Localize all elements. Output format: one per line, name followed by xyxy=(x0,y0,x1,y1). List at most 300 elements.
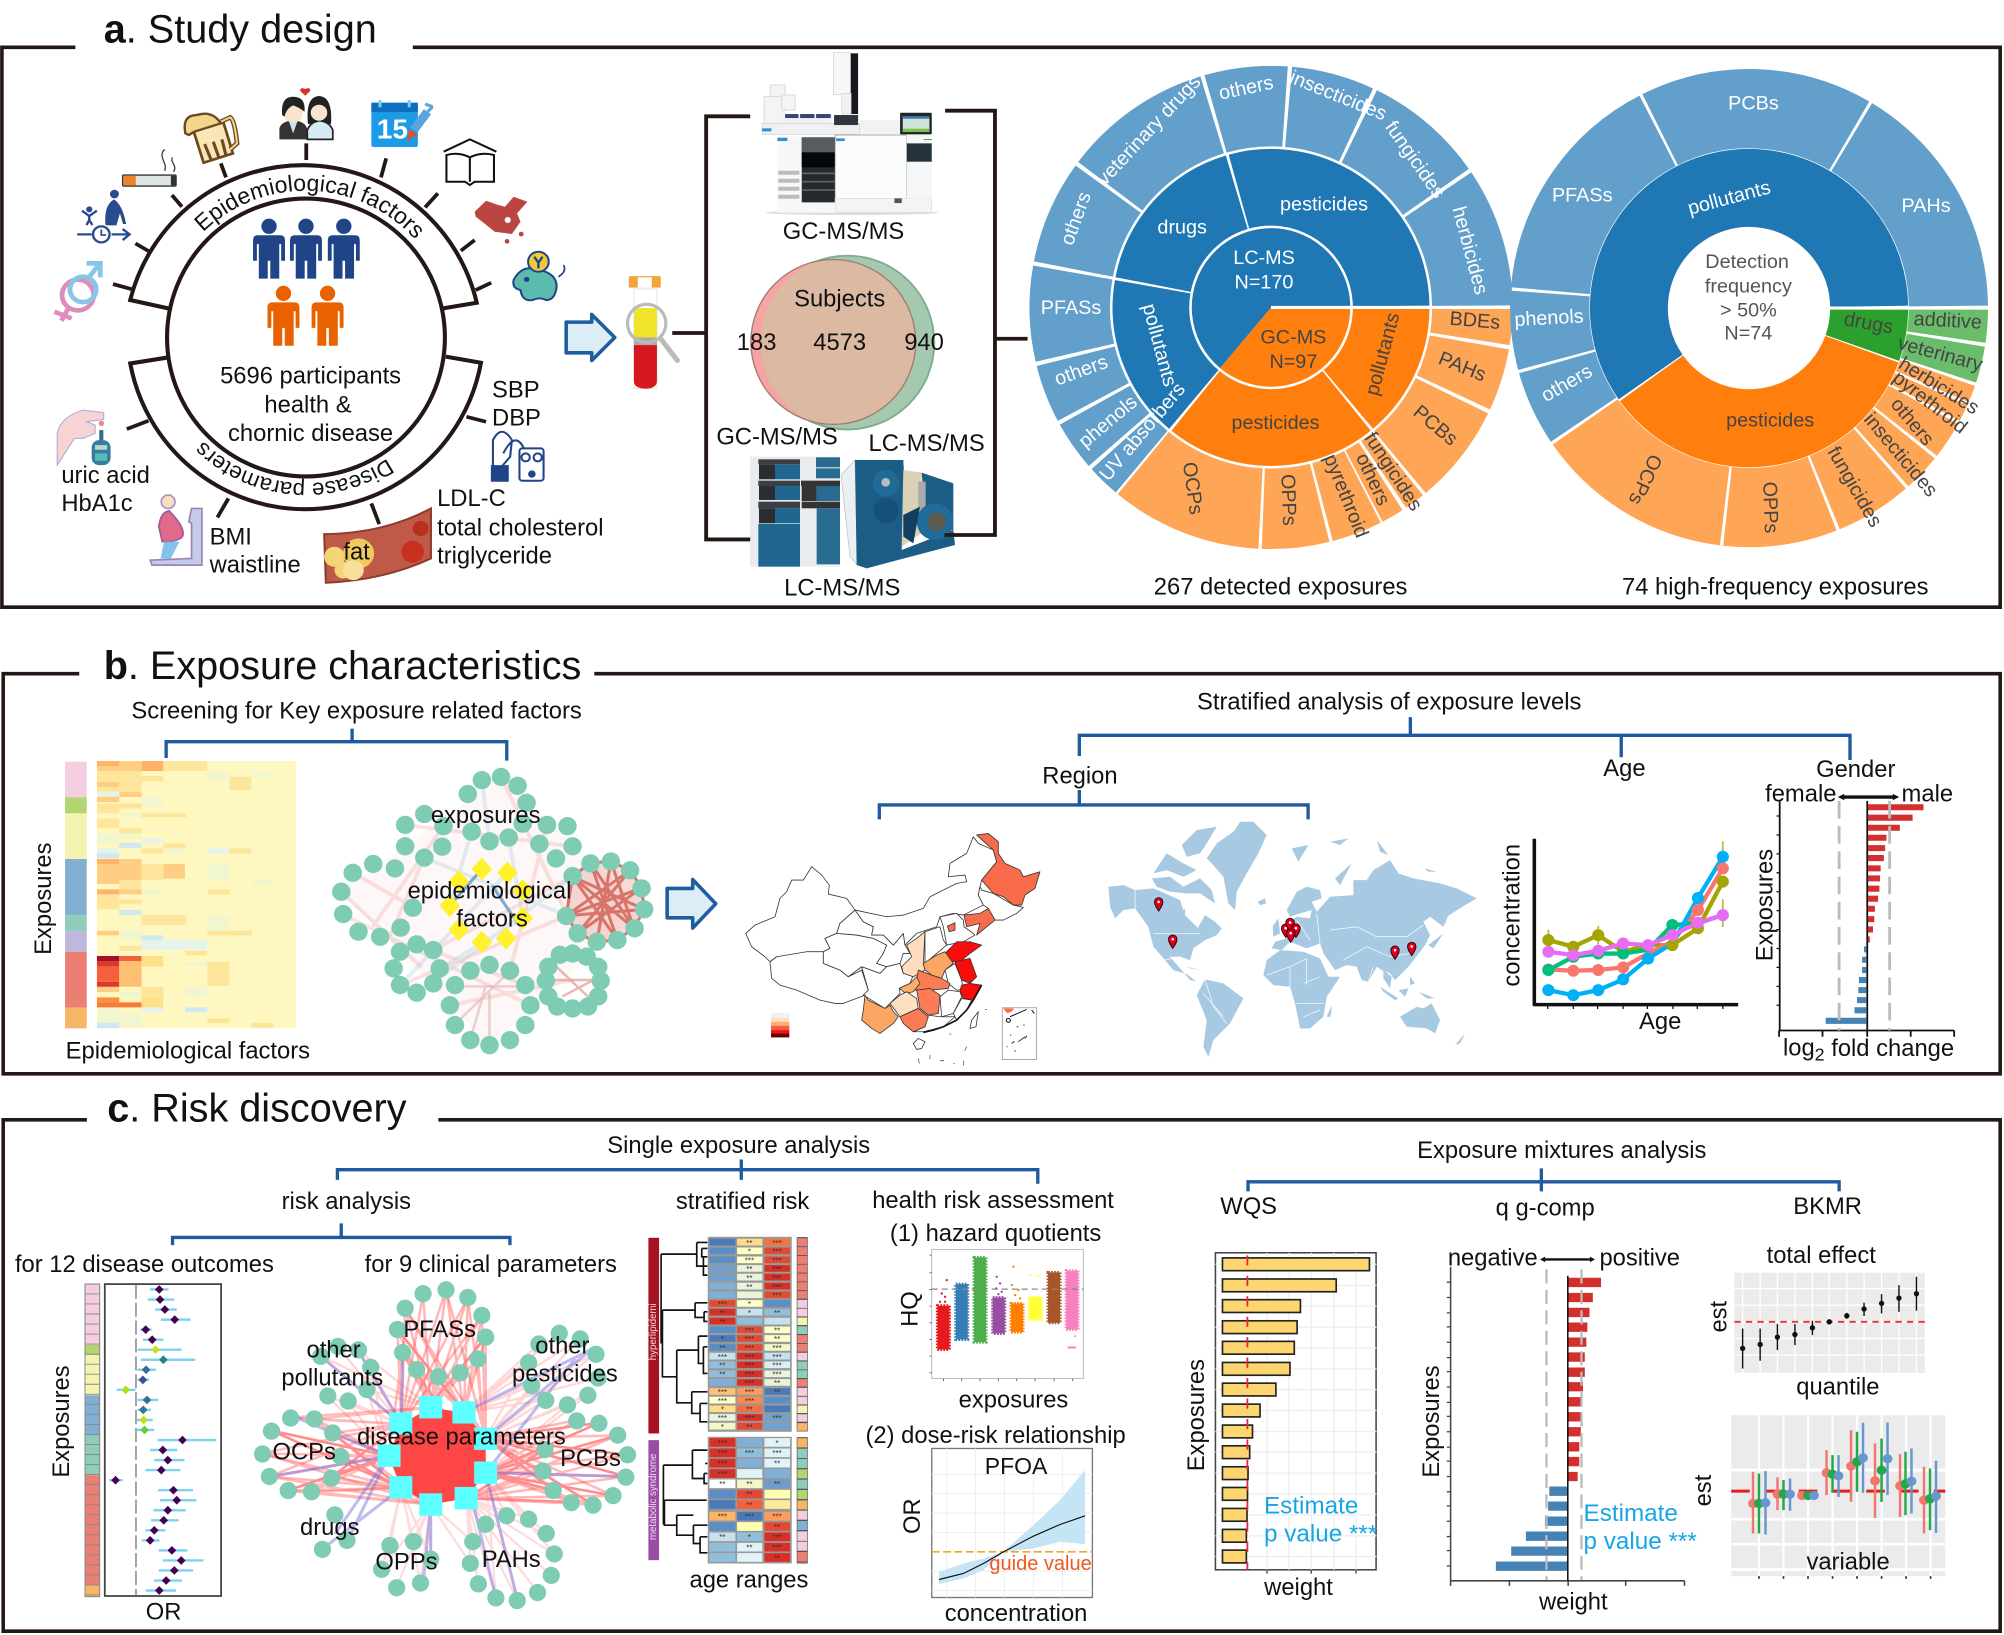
label: OR axis: OR xyxy=(899,1498,926,1534)
chart: q g-comp weights: p value *** xyxy=(1584,1528,1697,1555)
icon: orange participants xyxy=(267,286,344,346)
sunburst labels: OPPs xyxy=(1276,474,1300,526)
label: quantile: quantile xyxy=(1796,1374,1879,1401)
disease parameter nodes xyxy=(378,1407,497,1505)
icon: LC-MS/MS instrument xyxy=(750,457,955,568)
heatmap: hyperlipidemia xyxy=(708,1237,792,1432)
white horizontal split xyxy=(1829,307,1991,309)
outer ring xyxy=(987,23,1555,591)
significance stars: * xyxy=(748,1300,751,1309)
label: health risk assessment: health risk assessment xyxy=(872,1187,1114,1214)
sunburst: 267 detected exposures xyxy=(987,23,1555,591)
significance stars xyxy=(718,1439,782,1562)
chart: WQS weights: p value *** xyxy=(1264,1521,1378,1548)
label: risk analysis: risk analysis xyxy=(282,1188,411,1215)
label: hazard quotients: (1) hazard quotients xyxy=(890,1220,1101,1247)
sunburst labels: OPPs xyxy=(1758,481,1782,534)
label: OR: OR xyxy=(146,1598,181,1625)
network labels: factors xyxy=(456,906,528,933)
labels: mixture methods: BKMR xyxy=(1793,1193,1862,1220)
participants text: 5696 participants xyxy=(220,362,401,389)
label: SBP DBP: SBP xyxy=(492,376,540,403)
significance stars: ** xyxy=(774,1388,780,1397)
label: 74 high-frequency exposures: 74 high-frequency exposures xyxy=(1622,573,1929,600)
sunburst labels: others xyxy=(1886,394,1938,450)
labels: outcome types: for 12 disease outcomes xyxy=(15,1251,274,1278)
label: log2 fold change: log xyxy=(1783,1035,1815,1062)
sunburst labels: additive xyxy=(1913,308,1982,334)
sunburst labels: veterinary drugs xyxy=(1093,71,1205,190)
significance stars: *** xyxy=(718,1352,727,1361)
sunburst labels: PAHs xyxy=(1901,195,1951,217)
dense exposure cluster xyxy=(566,861,644,942)
network labels xyxy=(408,802,571,933)
significance stars: ** xyxy=(746,1500,753,1509)
significance stars: *** xyxy=(745,1361,754,1370)
significance stars: *** xyxy=(772,1449,782,1458)
label: BMI waistline: waistline xyxy=(209,552,301,579)
labels: region age gender: Age xyxy=(1603,755,1646,782)
sunburst labels: insecticides xyxy=(1859,409,1942,501)
label: Exposures axis: Exposures xyxy=(1752,849,1779,961)
network: exposures and disease parameters xyxy=(262,1290,628,1600)
labels: region age gender xyxy=(1042,755,1895,789)
chart: gender fold change xyxy=(1777,801,1954,1037)
labels: outcome types: for 9 clinical parameters xyxy=(365,1251,617,1278)
label: SBP DBP xyxy=(492,376,541,432)
sunburst labels: OCPs xyxy=(1178,461,1207,516)
bracket: single exposure xyxy=(337,1159,1038,1184)
edges to PCBs xyxy=(466,1420,628,1505)
significance stars: ** xyxy=(746,1490,753,1499)
significance stars: ** xyxy=(746,1273,753,1282)
sunburst labels xyxy=(1514,93,1985,534)
sunburst labels: GC-MS xyxy=(1260,326,1326,348)
significance stars: *** xyxy=(772,1414,782,1423)
icon: age person and clock xyxy=(77,190,130,242)
significance stars: ** xyxy=(719,1370,726,1379)
sunburst labels: pesticides xyxy=(1231,412,1320,434)
label: log2 fold change: fold change xyxy=(1825,1035,1954,1062)
label: HQ: HQ xyxy=(896,1291,923,1327)
middle ring xyxy=(1582,141,1916,475)
significance stars: *** xyxy=(745,1388,754,1397)
Venn diagram: Subjects xyxy=(794,286,885,313)
chart: WQS weights: Estimate xyxy=(1264,1492,1358,1519)
network labels: pesticides xyxy=(512,1361,618,1388)
significance stars: *** xyxy=(718,1396,727,1405)
direction labels: negative xyxy=(1448,1244,1538,1271)
outer ring xyxy=(1468,27,2004,589)
significance stars: ** xyxy=(719,1308,726,1317)
forest plot xyxy=(85,1283,221,1597)
icon: GC-MS/MS instrument xyxy=(762,53,938,215)
gender direction labels: male xyxy=(1902,780,1953,807)
sunburst labels: PFASs xyxy=(1552,185,1613,207)
significance stars: ** xyxy=(774,1553,780,1562)
network labels: other xyxy=(535,1333,590,1360)
labels: region age gender: Region xyxy=(1042,762,1118,789)
significance stars: *** xyxy=(745,1352,754,1361)
label: stratified risk: stratified risk xyxy=(676,1188,809,1215)
significance stars: ** xyxy=(746,1282,753,1291)
labels: mixture methods: q g-comp xyxy=(1496,1195,1595,1222)
sunburst labels: others xyxy=(1217,72,1275,105)
significance stars: *** xyxy=(772,1344,782,1353)
significance stars: *** xyxy=(772,1282,782,1291)
icon: blood pressure glove and monitor xyxy=(492,432,544,481)
significance stars: *** xyxy=(772,1273,782,1282)
label: log2 fold change: 2 xyxy=(1815,1045,1825,1065)
bracket: stratified xyxy=(1079,717,1850,760)
gender direction labels: female xyxy=(1765,780,1836,807)
icon: piggy bank xyxy=(513,252,565,300)
sunburst: 74 high-frequency exposures xyxy=(1468,27,2004,589)
label: Age axis: Age xyxy=(1639,1008,1681,1035)
significance stars: *** xyxy=(772,1238,782,1247)
sunburst labels: PFASs xyxy=(1041,297,1101,319)
sunburst labels: LC-MS xyxy=(1233,247,1295,269)
label: stratified analysis: Stratified analysis of exposure levels xyxy=(1197,688,1582,715)
significance stars: *** xyxy=(772,1256,782,1265)
label: lipid measures: triglyceride xyxy=(437,543,552,570)
map inset xyxy=(1002,1008,1037,1059)
label: fat: fat xyxy=(343,539,370,566)
sunburst labels: veterinary xyxy=(1895,332,1985,376)
bracket: screening xyxy=(166,729,507,761)
significance stars: *** xyxy=(718,1300,727,1309)
bars xyxy=(1222,1258,1369,1563)
sunburst labels: OCPs xyxy=(1624,451,1666,508)
sunburst labels: others xyxy=(1351,450,1394,509)
sunburst labels: > 50% xyxy=(1720,300,1777,322)
disease bar: metabolic syndrome: metabolic syndrome xyxy=(648,1454,659,1540)
map legend xyxy=(771,1013,789,1037)
estimates xyxy=(111,1285,187,1595)
label: lipid measures: LDL-C xyxy=(437,485,506,512)
sunburst labels: UV absorbers xyxy=(1095,379,1190,486)
disease bar: hyperlipidemia xyxy=(648,1238,659,1433)
significance stars: *** xyxy=(772,1543,782,1552)
sunburst labels: fungicides xyxy=(1380,117,1449,203)
significance stars: ** xyxy=(774,1379,780,1388)
map: China exposure levels xyxy=(746,833,1040,1065)
network: exposures and epidemiological factors xyxy=(341,777,644,1046)
network labels: disease parameters xyxy=(357,1423,566,1450)
chart: dose-risk PFOA: PFOA xyxy=(985,1453,1048,1479)
icon: beer xyxy=(185,114,237,163)
icon: blue participants xyxy=(253,219,360,279)
sunburst labels: others xyxy=(1538,360,1596,407)
label: concentration: concentration xyxy=(1498,844,1525,987)
icon: cigarette xyxy=(123,149,176,186)
network labels: epidemiological xyxy=(408,878,571,905)
sunburst labels: pollutants xyxy=(1685,177,1773,220)
white horizontal split xyxy=(1271,306,1513,309)
label: SBP DBP: DBP xyxy=(492,405,541,432)
significance stars: ** xyxy=(746,1480,753,1489)
sunburst labels: herbicides xyxy=(1895,353,1983,419)
significance stars: *** xyxy=(745,1512,754,1521)
sunburst labels: BDEs xyxy=(1449,308,1501,334)
label: q g-comp weight: weight xyxy=(1538,1588,1608,1615)
epidemiological and disease ring diagram: Disease parameters xyxy=(197,442,394,496)
label: concentration axis: concentration xyxy=(945,1600,1087,1627)
icon: married couple xyxy=(279,88,333,139)
chart: WQS weights xyxy=(1215,1253,1378,1574)
label: WQS weight: weight xyxy=(1263,1574,1333,1601)
icon: artery with fat xyxy=(324,508,431,583)
sunburst labels: others xyxy=(1056,189,1096,248)
icon: calendar and syringe: 15 xyxy=(377,114,408,145)
significance stars: *** xyxy=(772,1370,782,1379)
label: BMI waistline xyxy=(209,523,301,579)
label: forest exposures: Exposures xyxy=(48,1365,75,1478)
significance stars: ** xyxy=(746,1422,753,1431)
gender direction labels xyxy=(1765,780,1953,807)
sunburst labels: N=74 xyxy=(1724,323,1772,345)
significance stars: *** xyxy=(718,1512,727,1521)
sunburst labels: PCBs xyxy=(1728,93,1779,115)
significance stars: * xyxy=(721,1405,724,1414)
sunburst labels: pesticides xyxy=(1726,410,1814,432)
significance stars: ** xyxy=(719,1533,726,1542)
label: BMI waistline: BMI xyxy=(210,523,252,550)
participants text: health & xyxy=(264,392,352,419)
icon: calendar and syringe xyxy=(371,100,433,147)
edges to OCPs xyxy=(262,1418,431,1505)
direction labels xyxy=(1448,1244,1680,1271)
significance stars: *** xyxy=(745,1414,754,1423)
heading: c. Risk discovery: c. Risk discovery xyxy=(107,1086,407,1130)
label: screening: Screening for Key exposure related factors xyxy=(131,697,582,724)
exposure nodes xyxy=(263,1290,628,1600)
significance stars: *** xyxy=(718,1459,727,1468)
edges to OPPs and PAHs xyxy=(382,1473,555,1600)
network labels: pollutants xyxy=(281,1365,383,1392)
epidemiological and disease ring diagram xyxy=(112,143,492,525)
bracket: risk analysis xyxy=(173,1223,510,1245)
significance stars: ** xyxy=(746,1543,753,1552)
significance stars xyxy=(718,1238,782,1431)
Venn diagram: 940 xyxy=(904,329,944,356)
significance stars: * xyxy=(721,1422,724,1431)
significance stars: ** xyxy=(774,1326,780,1335)
significance stars: *** xyxy=(772,1533,782,1542)
network labels: OPPs xyxy=(375,1549,438,1576)
label: venn GC-MS/MS: GC-MS/MS xyxy=(716,424,838,451)
sunburst labels xyxy=(1041,67,1501,541)
exposure class bar xyxy=(85,1283,100,1597)
significance stars: *** xyxy=(772,1361,782,1370)
label: venn LC-MS/MS: LC-MS/MS xyxy=(868,430,985,457)
significance stars: *** xyxy=(745,1335,754,1344)
middle ring xyxy=(1102,138,1440,477)
significance stars: *** xyxy=(745,1449,754,1458)
label: exposures: exposures xyxy=(959,1386,1068,1413)
exposure class colour bar xyxy=(65,762,87,1028)
sunburst labels: herbicides xyxy=(1447,204,1492,297)
label: GC-MS/MS: GC-MS/MS xyxy=(783,218,904,245)
sunburst labels: fungicides xyxy=(1360,428,1427,515)
significance stars: *** xyxy=(718,1414,727,1423)
label: Epidemiological factors: Epidemiological factors xyxy=(66,1037,310,1064)
panel a: study design xyxy=(0,7,2002,609)
significance stars: *** xyxy=(745,1344,754,1353)
significance stars: ** xyxy=(746,1265,753,1274)
significance stars: *** xyxy=(745,1370,754,1379)
label: lipid measures xyxy=(437,485,604,570)
significance stars: ** xyxy=(746,1238,753,1247)
significance stars: * xyxy=(721,1335,724,1344)
labels: region age gender: Gender xyxy=(1816,756,1895,783)
significance stars: *** xyxy=(718,1439,727,1448)
inner pie xyxy=(1215,252,1327,363)
significance stars: * xyxy=(748,1533,751,1542)
significance stars: *** xyxy=(772,1291,782,1300)
sunburst labels: fungicides xyxy=(1823,443,1886,531)
label: variable: variable xyxy=(1806,1549,1890,1576)
label: single exposure analysis: Single exposure analysis xyxy=(607,1132,870,1159)
significance stars: ** xyxy=(774,1308,780,1317)
labels: mixture methods: WQS xyxy=(1220,1193,1277,1220)
label: q g-comp exposures: Exposures xyxy=(1418,1365,1445,1478)
network labels: other xyxy=(306,1336,361,1363)
sunburst labels: pesticides xyxy=(1280,194,1368,216)
chart: BKMR single variable xyxy=(1731,1415,1945,1579)
significance stars: ** xyxy=(774,1335,780,1344)
arrow: to stratified analysis xyxy=(667,879,716,928)
sunburst labels: drugs xyxy=(1157,217,1207,239)
factor nodes xyxy=(440,858,533,954)
icon: gender xyxy=(54,263,100,321)
significance stars: *** xyxy=(772,1247,782,1256)
network labels: PFASs xyxy=(403,1316,476,1343)
significance stars: *** xyxy=(718,1469,727,1478)
significance stars: * xyxy=(748,1308,751,1317)
significance stars: * xyxy=(776,1439,779,1448)
label: LC-MS/MS: LC-MS/MS xyxy=(784,575,900,602)
heatmap: metabolic syndrome xyxy=(708,1437,792,1563)
exposure nodes xyxy=(341,777,644,1045)
sunburst labels: insecticides xyxy=(1287,67,1390,125)
network labels: drugs xyxy=(300,1514,360,1541)
label: uric acid HbA1c: uric acid xyxy=(61,462,150,489)
network labels: PCBs xyxy=(560,1445,621,1472)
map: world exposure studies xyxy=(1108,822,1477,1057)
sunburst labels: phenols xyxy=(1514,306,1584,331)
heading: a. Study design: a. Study design xyxy=(104,7,377,51)
label: est variable: est xyxy=(1690,1474,1717,1506)
label: uric acid HbA1c: HbA1c xyxy=(61,490,133,517)
bracket: mixtures xyxy=(1248,1168,1839,1191)
Venn diagram: 4573 xyxy=(813,329,866,356)
chart: dose-risk PFOA: guide value xyxy=(989,1553,1092,1575)
significance stars: *** xyxy=(772,1352,782,1361)
epidemiological and disease ring diagram: Epidemiological factors xyxy=(194,174,422,238)
label: dose-risk relationship: (2) dose-risk relationship xyxy=(866,1422,1126,1449)
stratified heatmap with dendrogram xyxy=(648,1237,807,1563)
network labels: OCPs xyxy=(272,1439,336,1466)
label: uric acid HbA1c xyxy=(61,462,150,517)
sunburst labels: N=170 xyxy=(1235,272,1293,294)
icon: seated person xyxy=(150,495,202,565)
heatmap: exposures by epidemiological factors xyxy=(65,761,296,1028)
significance stars: *** xyxy=(745,1256,754,1265)
significance stars: ** xyxy=(774,1459,780,1468)
icon: book xyxy=(444,139,496,185)
significance stars: ** xyxy=(774,1480,780,1489)
network labels: PAHs xyxy=(482,1546,541,1573)
significance stars: *** xyxy=(772,1512,782,1521)
icon: China map xyxy=(475,197,527,244)
chart: age concentration lines xyxy=(1534,839,1738,1009)
sunburst labels: pollutants xyxy=(1138,301,1181,389)
heading: b. Exposure characteristics: b. Exposure characteristics xyxy=(104,644,581,688)
sunburst labels: pyrethroid xyxy=(1888,367,1971,438)
network labels xyxy=(272,1316,621,1576)
chart: BKMR total effect xyxy=(1734,1273,1925,1373)
sunburst labels: drugs xyxy=(1842,308,1895,339)
instrument brackets xyxy=(672,111,1028,539)
significance stars: *** xyxy=(745,1379,754,1388)
chart: q g-comp weights xyxy=(1447,1267,1697,1586)
labels: mixture methods xyxy=(1220,1193,1862,1222)
significance stars: *** xyxy=(772,1265,782,1274)
disease bar: hyperlipidemia: hyperlipidemi xyxy=(648,1303,659,1360)
significance stars: * xyxy=(748,1247,751,1256)
heatmap cells xyxy=(97,761,296,1028)
significance stars: ** xyxy=(719,1317,726,1326)
map pins xyxy=(1154,898,1416,959)
dendrogram xyxy=(661,1242,707,1553)
significance stars: ** xyxy=(746,1405,753,1414)
label: age ranges: age ranges xyxy=(689,1567,809,1594)
direction labels: positive xyxy=(1599,1244,1680,1271)
significance stars: ** xyxy=(719,1361,726,1370)
edges to PFASs xyxy=(397,1290,486,1413)
panel c: risk discovery xyxy=(3,1086,2000,1631)
confidence intervals xyxy=(109,1289,216,1591)
purple negative edges xyxy=(271,1350,625,1600)
significance stars: *** xyxy=(745,1396,754,1405)
network labels: exposures xyxy=(431,802,541,829)
chart: hazard quotient strips xyxy=(929,1249,1083,1381)
sunburst labels: PAHs xyxy=(1435,347,1489,386)
sunburst labels: phenols xyxy=(1074,391,1142,453)
icon: finger prick and glucose meter xyxy=(57,410,111,465)
participants text: chornic disease xyxy=(228,420,393,447)
bracket: region xyxy=(879,790,1308,819)
participants text xyxy=(220,362,401,447)
label: Exposures: Exposures xyxy=(30,842,57,955)
label: lipid measures: total cholesterol xyxy=(437,514,604,541)
label: WQS exposures: Exposures xyxy=(1183,1359,1210,1471)
significance stars: ** xyxy=(719,1344,726,1353)
significance stars: ** xyxy=(774,1522,780,1531)
chart: dose-risk PFOA xyxy=(932,1448,1092,1598)
sunburst labels: pyrethroid xyxy=(1319,451,1372,541)
label: est total: est xyxy=(1705,1300,1732,1333)
significance stars: ** xyxy=(719,1480,726,1489)
Venn diagram: 183 xyxy=(737,329,776,356)
exposure annotation bar xyxy=(797,1237,807,1563)
arrow: to sample xyxy=(566,314,615,360)
label: 267 detected exposures: 267 detected exposures xyxy=(1154,573,1408,600)
sunburst labels: Detection xyxy=(1705,251,1789,273)
edges to other pesticides and pollutants xyxy=(464,1333,598,1473)
icon: blood tube with magnifier xyxy=(628,276,677,389)
